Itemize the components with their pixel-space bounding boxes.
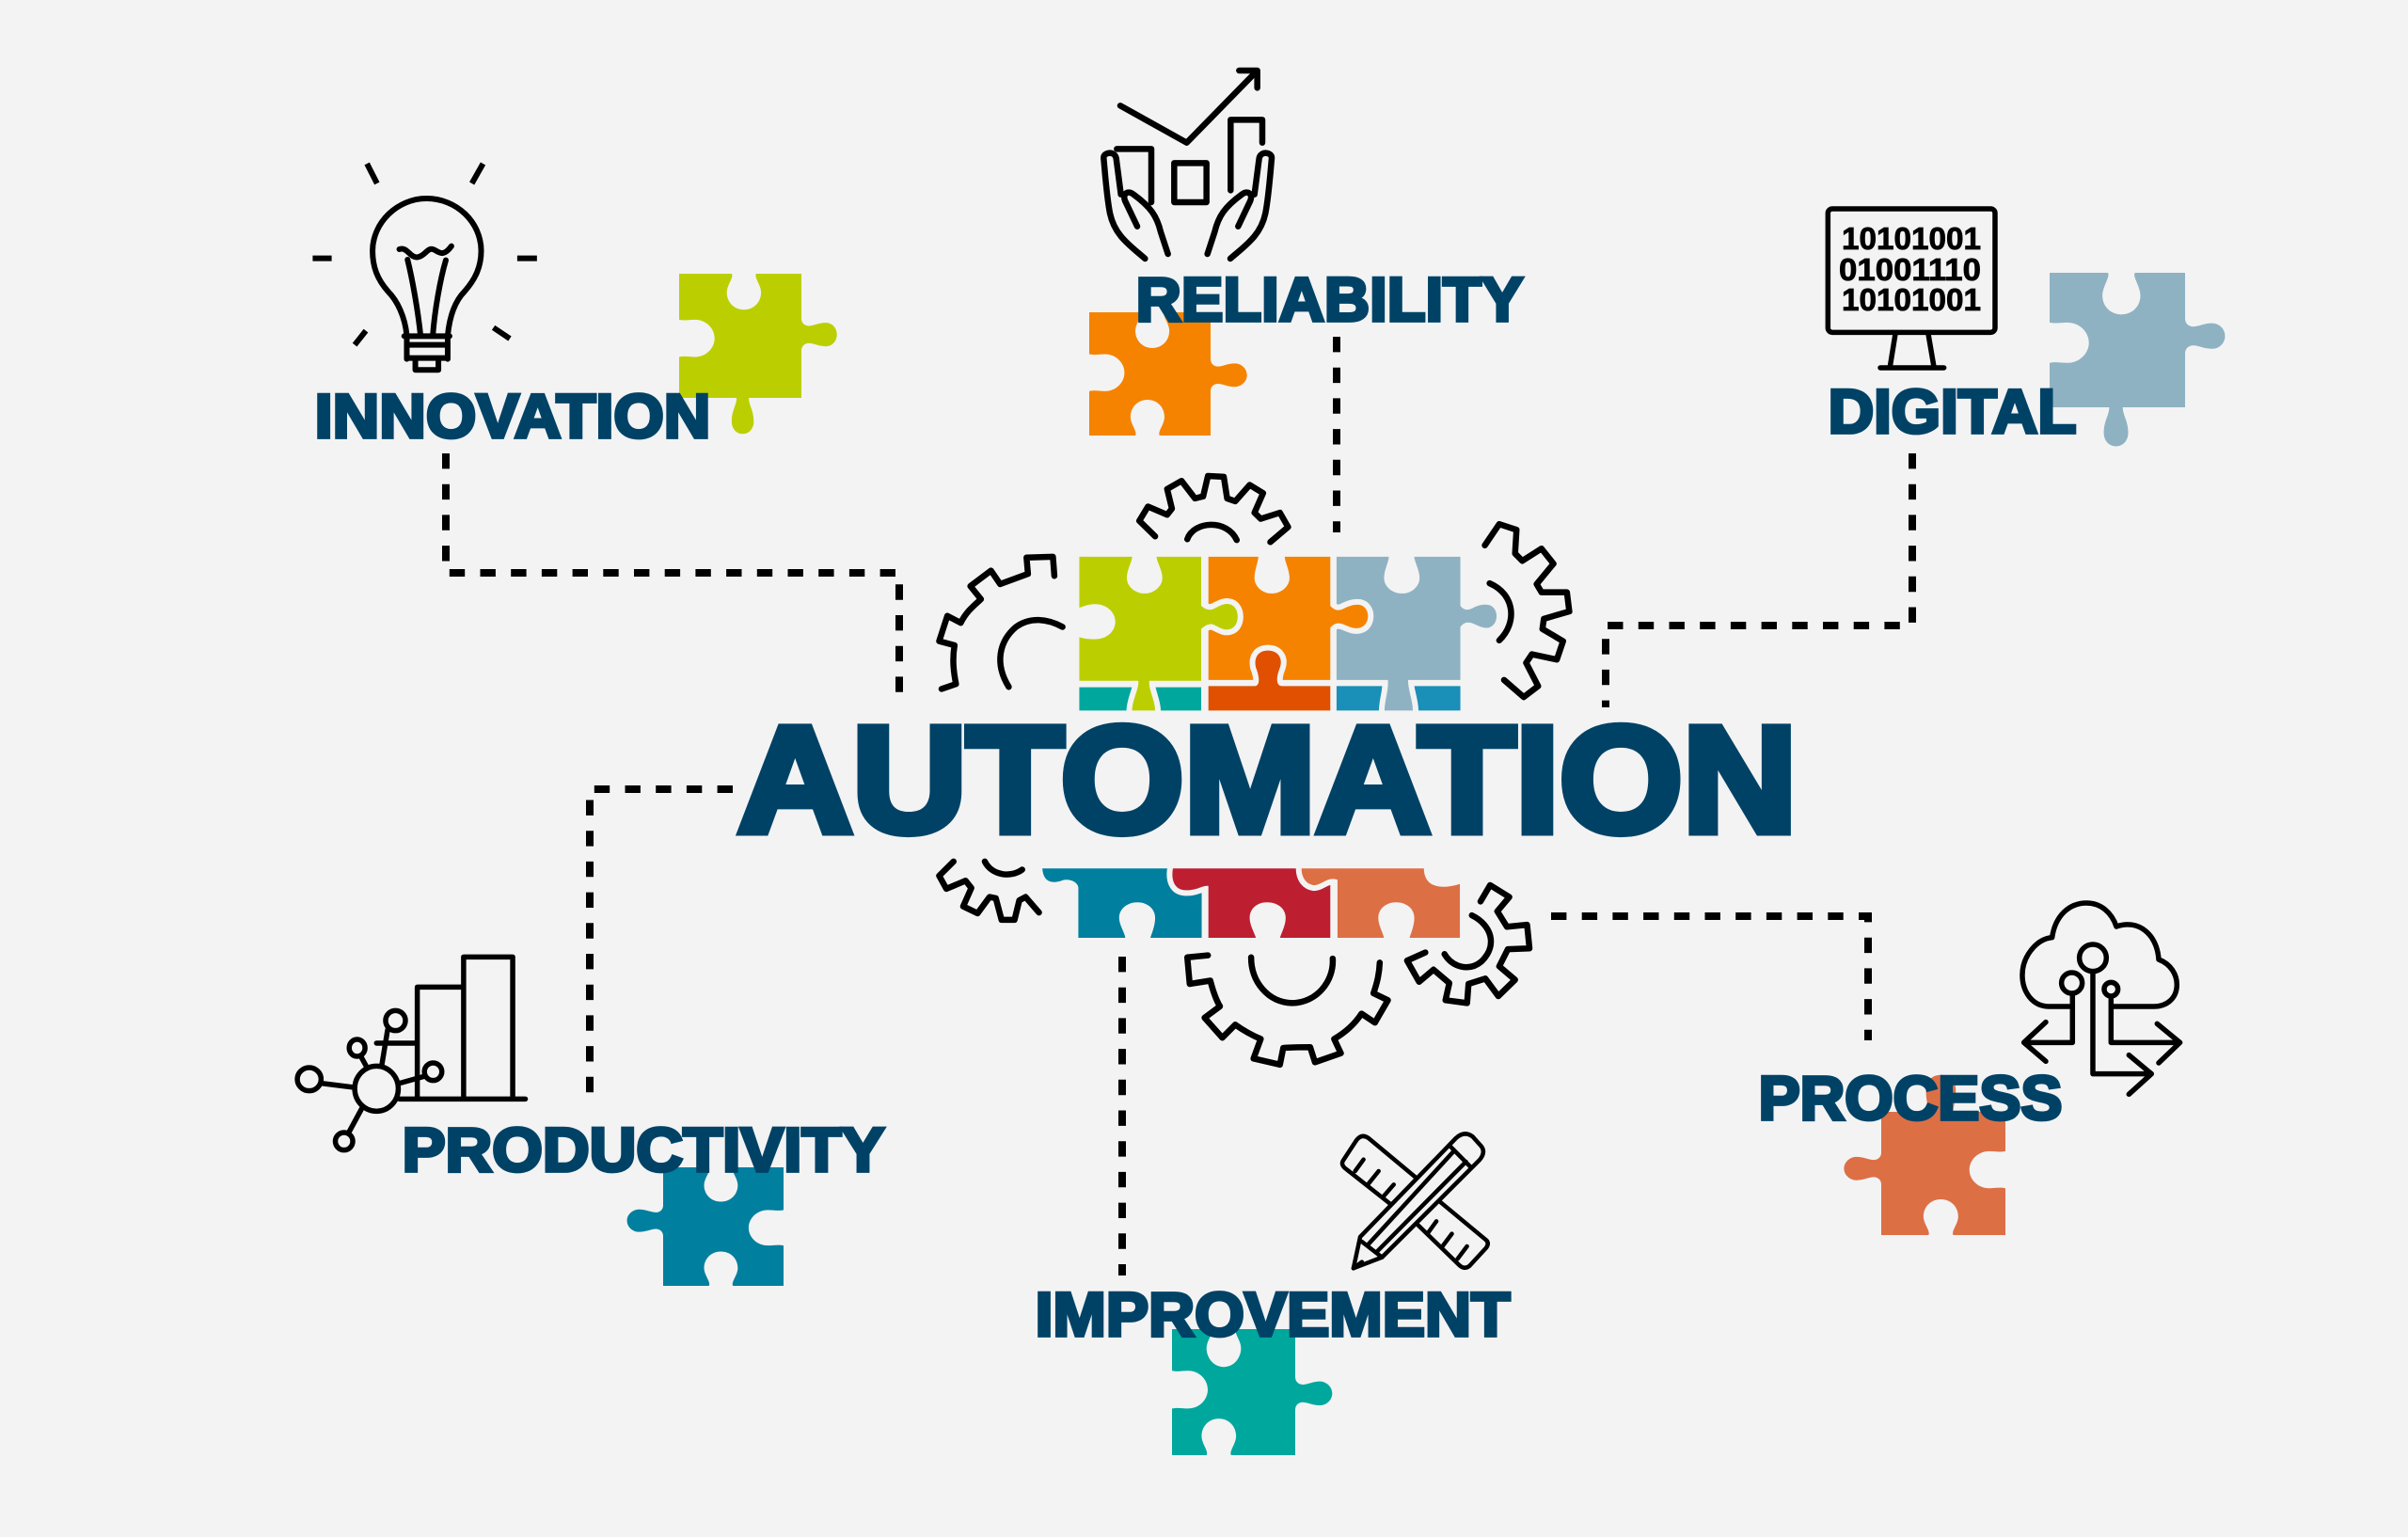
panel: digital (1606, 209, 2225, 707)
label: innovation: INNOVATION (315, 382, 710, 451)
binary digits: 10101001 (1842, 282, 1981, 317)
label: digital: DIGITAL (1829, 377, 2076, 446)
icon: network and bar chart (297, 957, 526, 1150)
puzzle piece: grey blue (2050, 273, 2225, 446)
connector: reliability to centre (1333, 337, 1340, 532)
label: improvement: IMPROVEMENT (1036, 1280, 1510, 1349)
panel: process (1551, 903, 2180, 1235)
connector: productivity to title (590, 789, 733, 1097)
central puzzle: lower pieces (1042, 868, 1460, 938)
icon: cloud with arrows (2022, 903, 2180, 1094)
panel: productivity (297, 789, 884, 1286)
puzzle piece: teal blue (627, 1167, 784, 1286)
panel: reliability (1089, 71, 1523, 532)
label: process: PROCESS (1759, 1064, 2062, 1133)
panel: innovation (312, 164, 899, 707)
panel: improvement (1036, 957, 1510, 1455)
connector: improvement to centre (1118, 957, 1126, 1276)
binary digits (1839, 221, 1981, 317)
puzzle piece: lime green (679, 274, 837, 434)
connector: innovation to title (446, 453, 899, 707)
title: AUTOMATION (737, 695, 1797, 864)
icon: monitor with binary code (1828, 209, 1995, 368)
puzzle piece: orange (1089, 312, 1247, 436)
connector: process to centre (1551, 916, 1868, 1040)
label: productivity: PRODUCTIVITY (403, 1116, 884, 1184)
binary digits: 10101001 (1842, 221, 1981, 256)
puzzle piece: coral (1844, 1075, 2005, 1235)
connector: digital to title (1606, 453, 1912, 707)
central puzzle: upper pieces (1079, 557, 1497, 710)
binary digits: 01001110 (1839, 252, 1981, 287)
gears below the title (939, 862, 1529, 1065)
gears above the title (939, 476, 1569, 697)
icon: hands holding growth chart (1103, 71, 1272, 259)
monitor outline (1828, 209, 1995, 368)
puzzle piece: teal (1172, 1329, 1332, 1455)
label: reliability: RELIABILITY (1136, 265, 1523, 334)
panel: central puzzle and gears (737, 476, 1797, 1065)
icon: pencil and ruler (1342, 1133, 1488, 1268)
icon: light bulb (312, 164, 537, 370)
